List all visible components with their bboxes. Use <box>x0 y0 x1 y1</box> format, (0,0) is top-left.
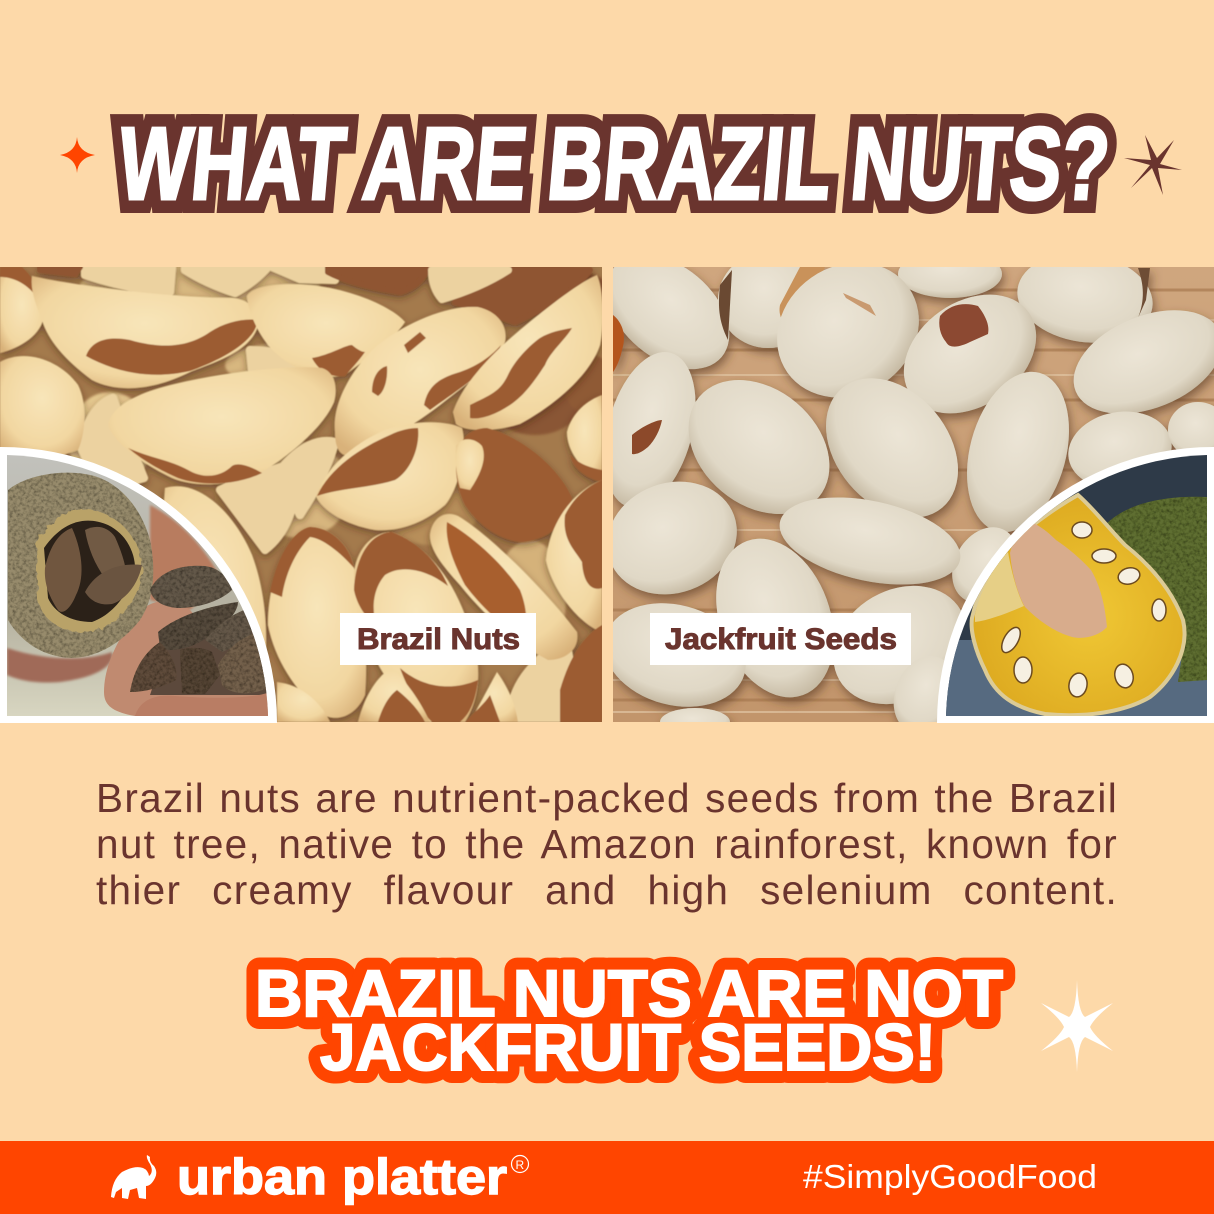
inset photo: Brazil nut pod in hand <box>0 447 277 723</box>
icon: dark sparkle <box>1124 135 1182 195</box>
logo: urban platter: R <box>516 1158 524 1172</box>
photo: Brazil nuts <box>0 264 616 722</box>
callout: Brazil nuts are not jackfruit seeds: BRAZIL NUTS ARE NOT <box>255 956 1003 1030</box>
callout: Brazil nuts are not jackfruit seeds: JACKFRUIT SEEDS! <box>320 1010 936 1084</box>
callout: Brazil nuts are not jackfruit seeds <box>255 956 1003 1084</box>
paragraph: nut tree, native to the Amazon rainforest, known for <box>96 821 1118 867</box>
paragraph: Brazil nuts are nutrient-packed seeds from the Brazil <box>96 775 1118 821</box>
paragraph <box>96 775 1118 913</box>
callout: Brazil nuts are not jackfruit seeds: JACKFRUIT SEEDS! <box>320 1010 936 1084</box>
icon: orange sparkle <box>60 137 95 173</box>
hashtag: #SimplyGoodFood <box>803 1158 1097 1195</box>
callout: Brazil nuts are not jackfruit seeds: BRAZIL NUTS ARE NOT <box>255 956 1003 1030</box>
paragraph: thier creamy flavour and high selenium content. <box>96 867 1118 913</box>
icon: elephant logo <box>111 1155 156 1199</box>
logo: urban platter: urban platter <box>177 1149 507 1205</box>
shell <box>8 473 153 658</box>
footer bar <box>0 1141 1214 1214</box>
label: Brazil Nuts <box>340 613 536 665</box>
label: Jackfruit Seeds <box>650 613 911 665</box>
inset photo: cut jackfruit <box>937 447 1214 723</box>
label: Brazil Nuts: Brazil Nuts <box>357 623 520 656</box>
loose nuts <box>130 566 268 694</box>
label: Jackfruit Seeds: Jackfruit Seeds <box>665 623 897 656</box>
icon: white sparkle <box>1041 980 1113 1072</box>
photo: jackfruit seeds <box>613 267 1214 722</box>
